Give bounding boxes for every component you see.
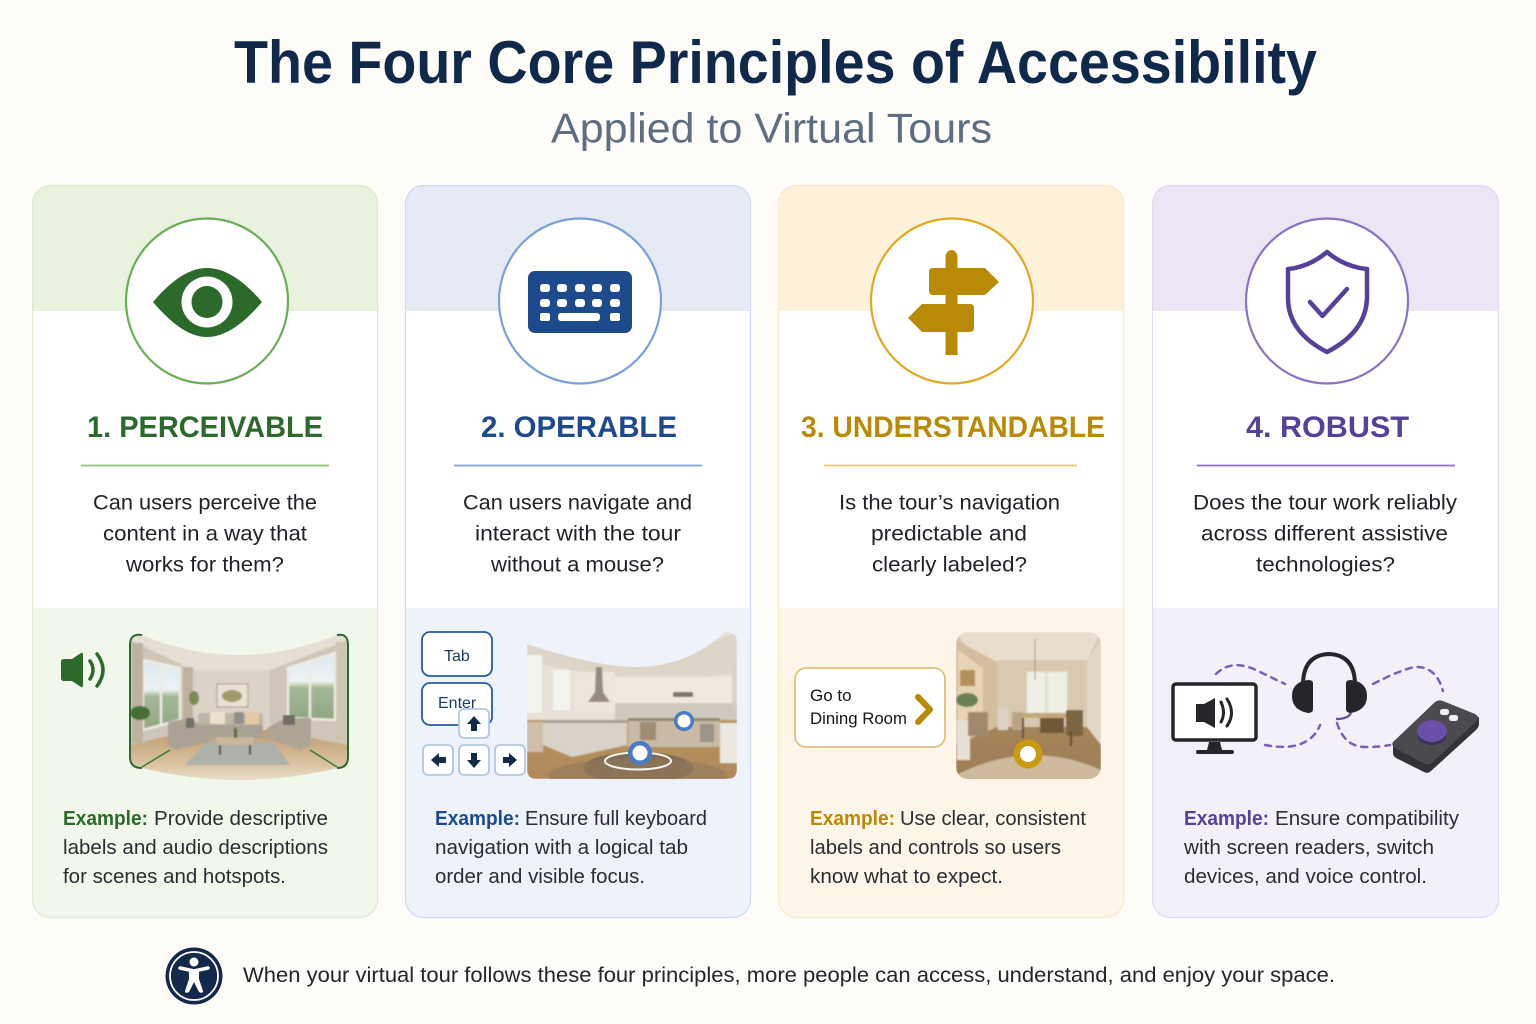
- subtitle: Applied to Virtual Tours: [551, 104, 992, 152]
- question: clearly labeled?: [872, 552, 1027, 576]
- button: go to dining room: Dining Room: [810, 709, 907, 728]
- question: [839, 490, 1060, 576]
- example text: Use clear, consistent: [900, 808, 1086, 830]
- question: [93, 490, 317, 576]
- button: go to dining room: Go to: [810, 686, 852, 705]
- card background: [1152, 186, 1498, 918]
- example text: [1183, 808, 1459, 888]
- icon: keyboard: [499, 218, 661, 384]
- example text: labels and controls so users: [810, 837, 1061, 859]
- icon: shield: [1246, 218, 1408, 384]
- example text: Example:: [810, 808, 895, 830]
- example text: Example:: [63, 808, 148, 830]
- card background: [406, 186, 751, 918]
- panel: operable: [406, 186, 751, 918]
- card background: [778, 186, 1124, 918]
- hotspot marker: [1014, 740, 1042, 768]
- hotspot markers: [605, 711, 694, 770]
- question: without a mouse?: [490, 552, 664, 576]
- panel: understandable: [778, 186, 1124, 918]
- icon: headset: [1292, 654, 1367, 719]
- icon: switch device: [1392, 700, 1479, 773]
- example text: [63, 808, 328, 888]
- icon: monitor with speaker: [1173, 684, 1256, 754]
- photo: dining room: [956, 632, 1101, 785]
- question: [1193, 490, 1457, 576]
- icon: accessibility: [166, 948, 222, 1004]
- example text: for scenes and hotspots.: [63, 866, 286, 888]
- heading: 2. OPERABLE: [481, 411, 677, 444]
- example text: devices, and voice control.: [1184, 866, 1427, 888]
- example text: Ensure full keyboard: [525, 808, 707, 830]
- example text: with screen readers, switch: [1183, 837, 1434, 859]
- example text: Provide descriptive: [154, 808, 328, 830]
- question: Can users navigate and: [463, 490, 692, 514]
- card background: [32, 186, 378, 918]
- panorama: living room: [130, 630, 348, 785]
- button: go to dining room: [795, 668, 945, 747]
- title: The Four Core Principles of Accessibility: [234, 29, 1318, 96]
- icon: speaker: [61, 653, 103, 687]
- icon: eye: [126, 218, 288, 384]
- example text: Ensure compatibility: [1275, 808, 1459, 830]
- example text: labels and audio descriptions: [63, 837, 328, 859]
- question: predictable and: [871, 522, 1027, 546]
- panorama: kitchen: [527, 632, 737, 779]
- keys: tab and enter: Tab: [444, 648, 470, 665]
- question: content in a way that: [103, 522, 307, 546]
- footer message: When your virtual tour follows these four principles, more people can access, understand, and enjoy your space.: [243, 963, 1335, 987]
- question: works for them?: [125, 552, 284, 576]
- example text: order and visible focus.: [435, 866, 645, 888]
- example text: know what to expect.: [810, 866, 1003, 888]
- question: Is the tour’s navigation: [839, 490, 1060, 514]
- panel: robust: [1152, 186, 1498, 918]
- heading: 4. ROBUST: [1246, 411, 1409, 444]
- example text: navigation with a logical tab: [435, 837, 688, 859]
- question: technologies?: [1256, 552, 1395, 576]
- icon: signpost: [871, 218, 1033, 384]
- question: [463, 490, 692, 576]
- panel: perceivable: [32, 186, 378, 918]
- question: Does the tour work reliably: [1193, 490, 1457, 514]
- keys: tab and enter: Enter: [438, 695, 477, 712]
- keys: tab and enter: [422, 632, 492, 725]
- question: Can users perceive the: [93, 490, 317, 514]
- heading: 1. PERCEIVABLE: [87, 411, 323, 444]
- heading: 3. UNDERSTANDABLE: [801, 411, 1105, 444]
- example text: [810, 808, 1086, 888]
- dashed connectors: [1216, 665, 1443, 747]
- keys: arrows: [423, 709, 525, 775]
- example text: Example:: [435, 808, 520, 830]
- example text: [435, 808, 707, 888]
- example text: Example:: [1184, 808, 1269, 830]
- question: interact with the tour: [475, 522, 681, 546]
- question: across different assistive: [1201, 522, 1448, 546]
